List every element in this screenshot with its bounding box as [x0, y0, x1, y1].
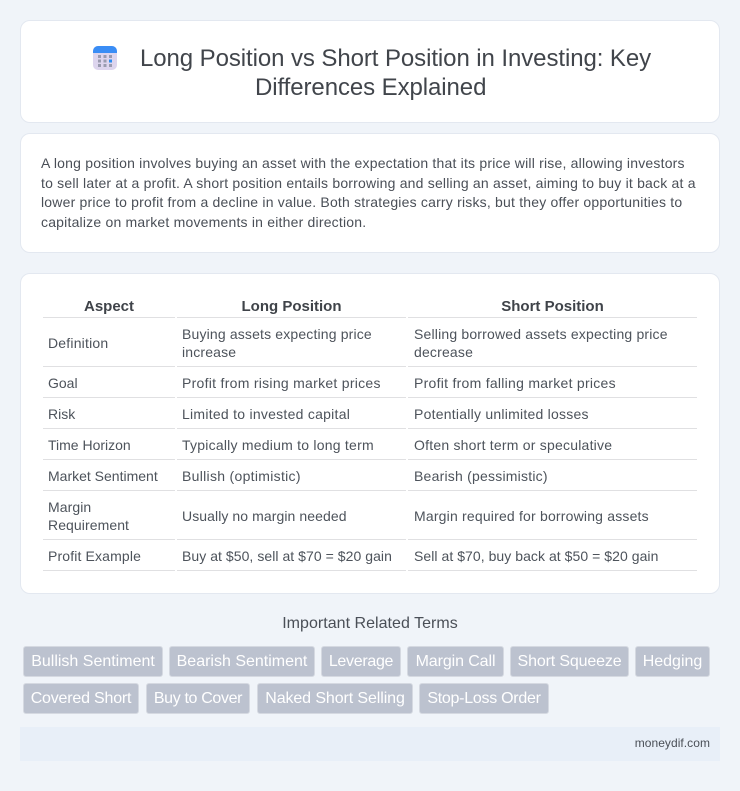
text block: intro paragraph: lower price to profit from a decline in value. Both strategies carry risks, but they offer opportunities to: [41, 194, 682, 210]
row: Definition short: Selling borrowed assets expecting price: [414, 326, 668, 342]
footer: site name: moneydif.com: [635, 736, 710, 750]
row label: Risk: Risk: [48, 406, 75, 422]
tag: Bullish Sentiment: Bullish Sentiment: [31, 653, 155, 670]
row: Goal long: Profit from rising market prices: [182, 375, 381, 391]
tag: Buy to Cover: [146, 683, 250, 714]
heading: related terms: Important Related Terms: [282, 615, 458, 632]
row label: Goal: Goal: [48, 375, 78, 391]
comparison table: [43, 298, 697, 571]
table header: Aspect: Aspect: [84, 298, 134, 315]
row label: Market Sentiment: Market Sentiment: [48, 468, 158, 484]
row label: Profit Example: Profit Example: [48, 548, 141, 564]
tag: Stop-Loss Order: Stop-Loss Order: [427, 690, 541, 707]
tag: Short Squeeze: [510, 646, 629, 677]
row: Margin Requirement long: Usually no margin needed: [182, 508, 347, 524]
tag: Margin Call: [407, 646, 504, 677]
heading: title: Long Position vs Short Position in Investing: Key: [140, 45, 651, 72]
heading: title: Differences Explained: [255, 74, 486, 101]
row label: Time Horizon: Time Horizon: [48, 437, 131, 453]
row: Definition long: Buying assets expecting price: [182, 326, 372, 342]
tag: Stop-Loss Order: [419, 683, 549, 714]
row: Definition long: increase: [182, 344, 236, 360]
heading: title: [140, 45, 651, 101]
text block: intro paragraph: A long position involves buying an asset with the expectation that its price will rise, allowing investors: [41, 155, 685, 171]
tag: Leverage: Leverage: [329, 653, 393, 670]
panel: title card: [20, 20, 720, 123]
row: Market Sentiment long: Bullish (optimistic): [182, 468, 301, 484]
row label: Margin Requirement: [48, 499, 129, 533]
tag: Bearish Sentiment: [169, 646, 315, 677]
row label: Margin Requirement: Requirement: [48, 517, 129, 533]
tag: Naked Short Selling: [257, 683, 413, 714]
row: Market Sentiment short: Bearish (pessimistic): [414, 468, 548, 484]
row: Risk long: Limited to invested capital: [182, 406, 350, 422]
tag: Covered Short: [23, 683, 139, 714]
table header: Long Position: Long Position: [242, 298, 341, 315]
text block: intro paragraph: capitalize on market movements in either direction.: [41, 214, 366, 230]
tag: Covered Short: Covered Short: [31, 690, 131, 707]
row label: Margin Requirement: Margin: [48, 499, 91, 515]
row: Definition short: [414, 326, 668, 360]
tag: Buy to Cover: Buy to Cover: [154, 690, 242, 707]
row: Profit Example long: Buy at $50, sell at $70 = $20 gain: [182, 548, 392, 564]
tag: Hedging: Hedging: [643, 653, 702, 670]
row: Risk short: Potentially unlimited losses: [414, 406, 589, 422]
tag: Hedging: [635, 646, 710, 677]
tag: Bearish Sentiment: Bearish Sentiment: [177, 653, 307, 670]
footer bar: [20, 727, 720, 761]
row: Goal short: Profit from falling market prices: [414, 375, 616, 391]
tag: Leverage: [321, 646, 401, 677]
row label: Definition: Definition: [48, 335, 108, 351]
panel: intro card: [20, 133, 720, 253]
row: Definition short: decrease: [414, 344, 473, 360]
row: Time Horizon short: Often short term or speculative: [414, 437, 612, 453]
row: Margin Requirement short: Margin required for borrowing assets: [414, 508, 649, 524]
text block: intro paragraph: to sell later at a profit. A short position entails borrowing and selling an asset, aiming to buy it back at a: [41, 175, 696, 191]
tag: Naked Short Selling: Naked Short Selling: [265, 690, 405, 707]
row: Profit Example short: Sell at $70, buy back at $50 = $20 gain: [414, 548, 658, 564]
panel: comparison table card: [20, 273, 720, 594]
row: Time Horizon long: Typically medium to long term: [182, 437, 374, 453]
row: Definition long: [182, 326, 372, 360]
tag: Bullish Sentiment: [23, 646, 163, 677]
tag: Margin Call: Margin Call: [416, 653, 495, 670]
tag: Short Squeeze: Short Squeeze: [518, 653, 621, 670]
text block: intro paragraph: [41, 155, 696, 230]
icon: calendar: [93, 46, 117, 70]
table header: Short Position: Short Position: [501, 298, 604, 315]
